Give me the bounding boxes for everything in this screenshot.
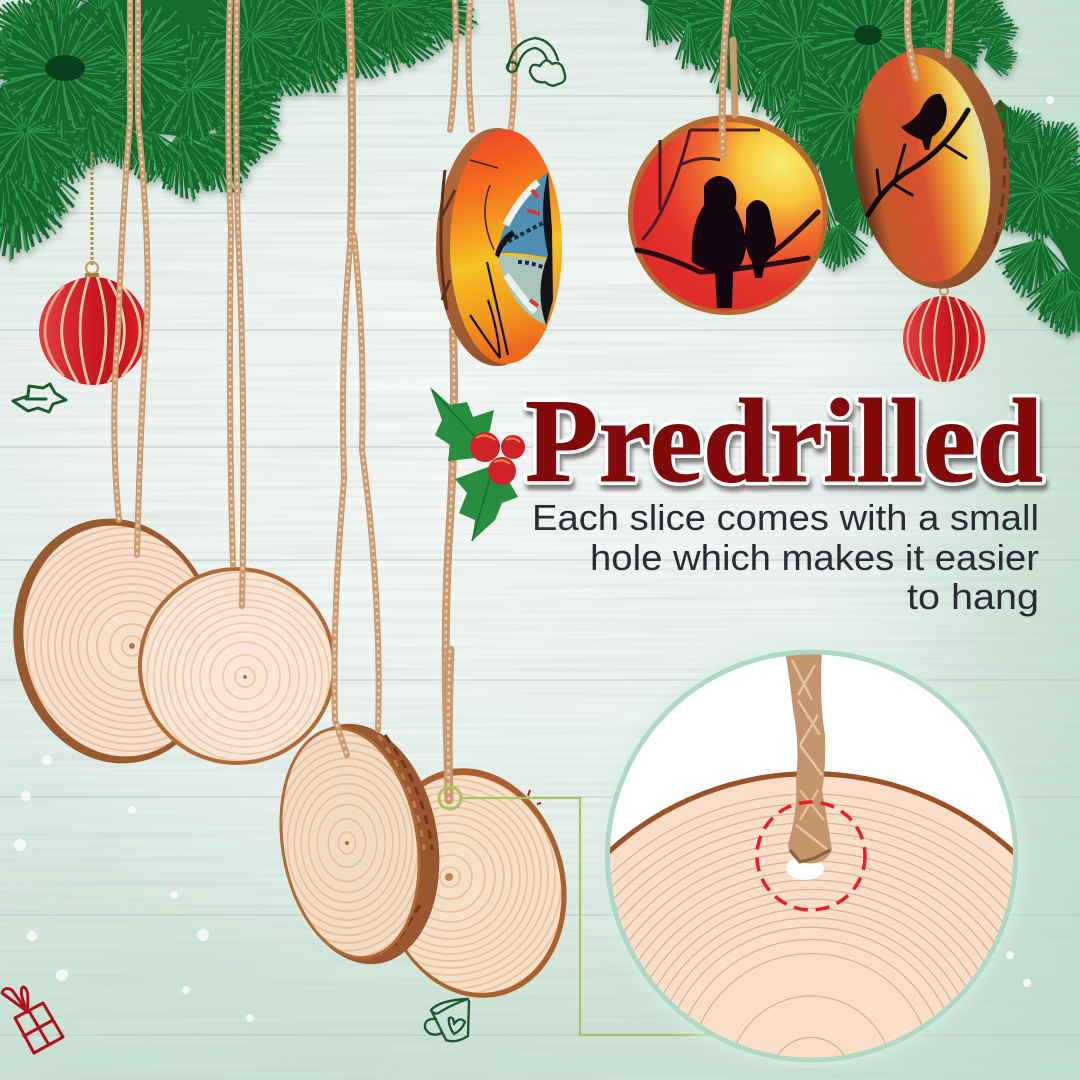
title: Predrilled (525, 374, 1043, 507)
wood slice 1 (13, 518, 199, 764)
description text: Each slice comes with a small (532, 497, 1039, 538)
icon: gift box (2, 987, 63, 1053)
bauble: right (903, 287, 985, 382)
drilled hole (786, 856, 824, 880)
description text (532, 497, 1039, 617)
pine branch: top left (0, 0, 493, 267)
icon: holly leaf outline (13, 384, 66, 412)
icon: mug with heart (425, 999, 469, 1041)
rope: behind butterfly ornament (446, 0, 515, 790)
title: Predrilled (525, 374, 1043, 507)
twine on painted ornaments (722, 0, 951, 155)
twine: slice 3 (334, 0, 379, 755)
ornament: bird on branch slice (840, 40, 1021, 296)
ornament: two birds slice (628, 115, 828, 315)
magnified slice (610, 771, 1013, 1058)
wood slice 3 (front) (279, 724, 440, 964)
ornament: butterfly slice (436, 128, 562, 366)
red dashed highlight (757, 802, 865, 910)
twine: slice 2 (228, 0, 243, 606)
magnified twine (785, 650, 832, 863)
description text: hole which makes it easier (590, 537, 1039, 578)
small red marks (528, 790, 541, 804)
icon: rainbow and cloud (507, 38, 565, 86)
twine: slice 4 knot (448, 650, 450, 800)
pine branch: top right (623, 0, 1080, 343)
wood slice 4 (rear) (404, 768, 567, 998)
bauble: left (39, 152, 147, 385)
description text: to hang (907, 576, 1039, 617)
holly decoration (430, 387, 525, 541)
connector line to zoom circle (439, 787, 710, 1035)
zoom circle (605, 646, 1022, 1066)
twine: slice 1 (114, 0, 148, 555)
wood slice 2 (138, 567, 332, 765)
